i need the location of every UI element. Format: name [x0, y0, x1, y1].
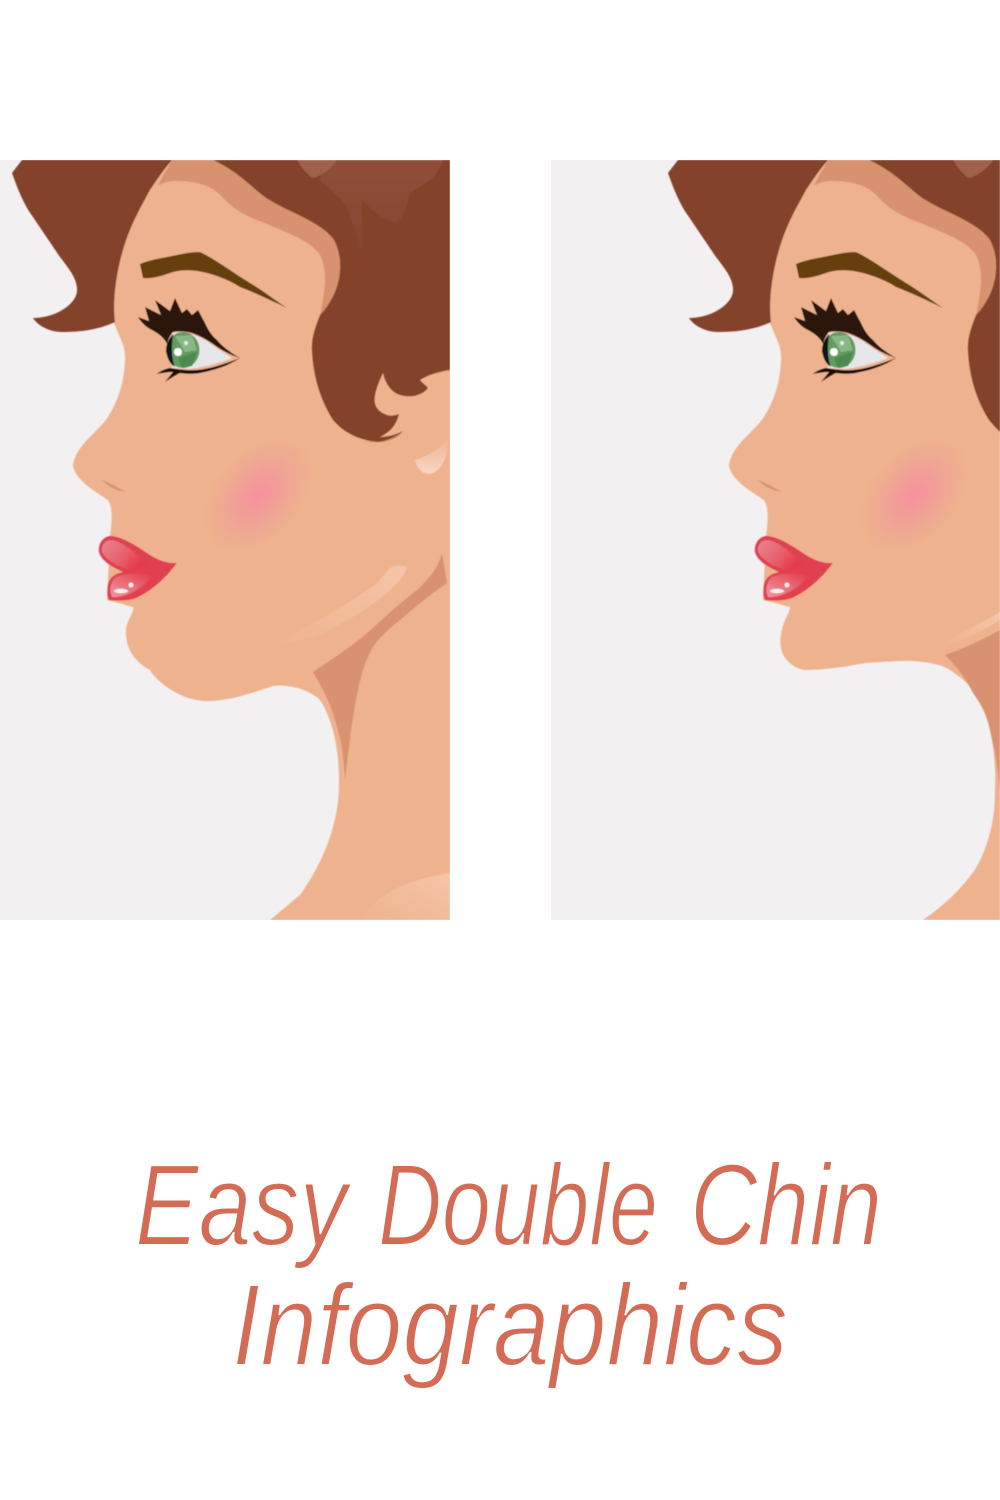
panel background — [0, 160, 339, 920]
upper lashes — [138, 298, 240, 358]
shoulder highlight — [382, 873, 450, 920]
lip outline — [755, 536, 833, 601]
lips — [99, 536, 177, 601]
portrait: before — [12, 160, 450, 920]
hair: crown and side curl — [213, 160, 450, 442]
nose line — [758, 480, 782, 492]
neck shadow — [945, 630, 1000, 790]
portrait: after — [668, 160, 1000, 920]
title — [135, 1140, 882, 1390]
face and neck with slim jaw — [729, 160, 1000, 920]
hair: curl shadow — [364, 432, 402, 442]
upper lashes — [794, 298, 896, 358]
lower lip fill — [766, 574, 809, 597]
lower lip fill — [110, 574, 153, 597]
jaw highlight — [960, 612, 1000, 637]
blush — [221, 456, 296, 534]
hair: crown and side curl — [869, 160, 1000, 432]
lip shine — [114, 589, 128, 593]
pupil — [822, 334, 831, 367]
panel background — [551, 160, 1000, 920]
nose line — [103, 480, 125, 492]
title word: Double: Double — [378, 1140, 658, 1270]
title word: Chin: Chin — [690, 1140, 882, 1270]
hair: lighter sheen — [953, 160, 993, 178]
neck shadow — [313, 553, 447, 780]
upper lip fill — [758, 540, 804, 569]
eyebrow — [140, 252, 287, 308]
lips — [755, 536, 833, 601]
eye — [138, 298, 240, 382]
face and neck with double chin — [73, 160, 450, 920]
hair: front lock — [12, 160, 172, 332]
lower lashes — [157, 358, 240, 382]
iris — [166, 332, 200, 368]
hair: front lock — [668, 160, 828, 332]
hairline shadow — [814, 160, 996, 315]
lip outline — [99, 536, 177, 601]
hair: lighter sheen — [320, 160, 442, 220]
title word: Easy: Easy — [135, 1140, 352, 1270]
earlobe highlight — [415, 443, 448, 474]
blush — [833, 412, 995, 578]
lower lashes — [813, 358, 896, 382]
jaw highlight — [320, 566, 407, 628]
lip shine — [770, 589, 784, 593]
eye — [794, 298, 896, 382]
panel: after, slim chin profile — [551, 160, 1000, 920]
panel: before, double chin profile — [0, 160, 450, 920]
hairline shadow — [158, 160, 340, 315]
eye white — [172, 332, 232, 369]
eye white — [828, 332, 888, 369]
upper lip fill — [101, 540, 138, 568]
eyebrow — [796, 252, 943, 308]
pupil — [166, 334, 175, 367]
title line 2: Infographics — [232, 1260, 788, 1390]
iris — [822, 332, 856, 368]
